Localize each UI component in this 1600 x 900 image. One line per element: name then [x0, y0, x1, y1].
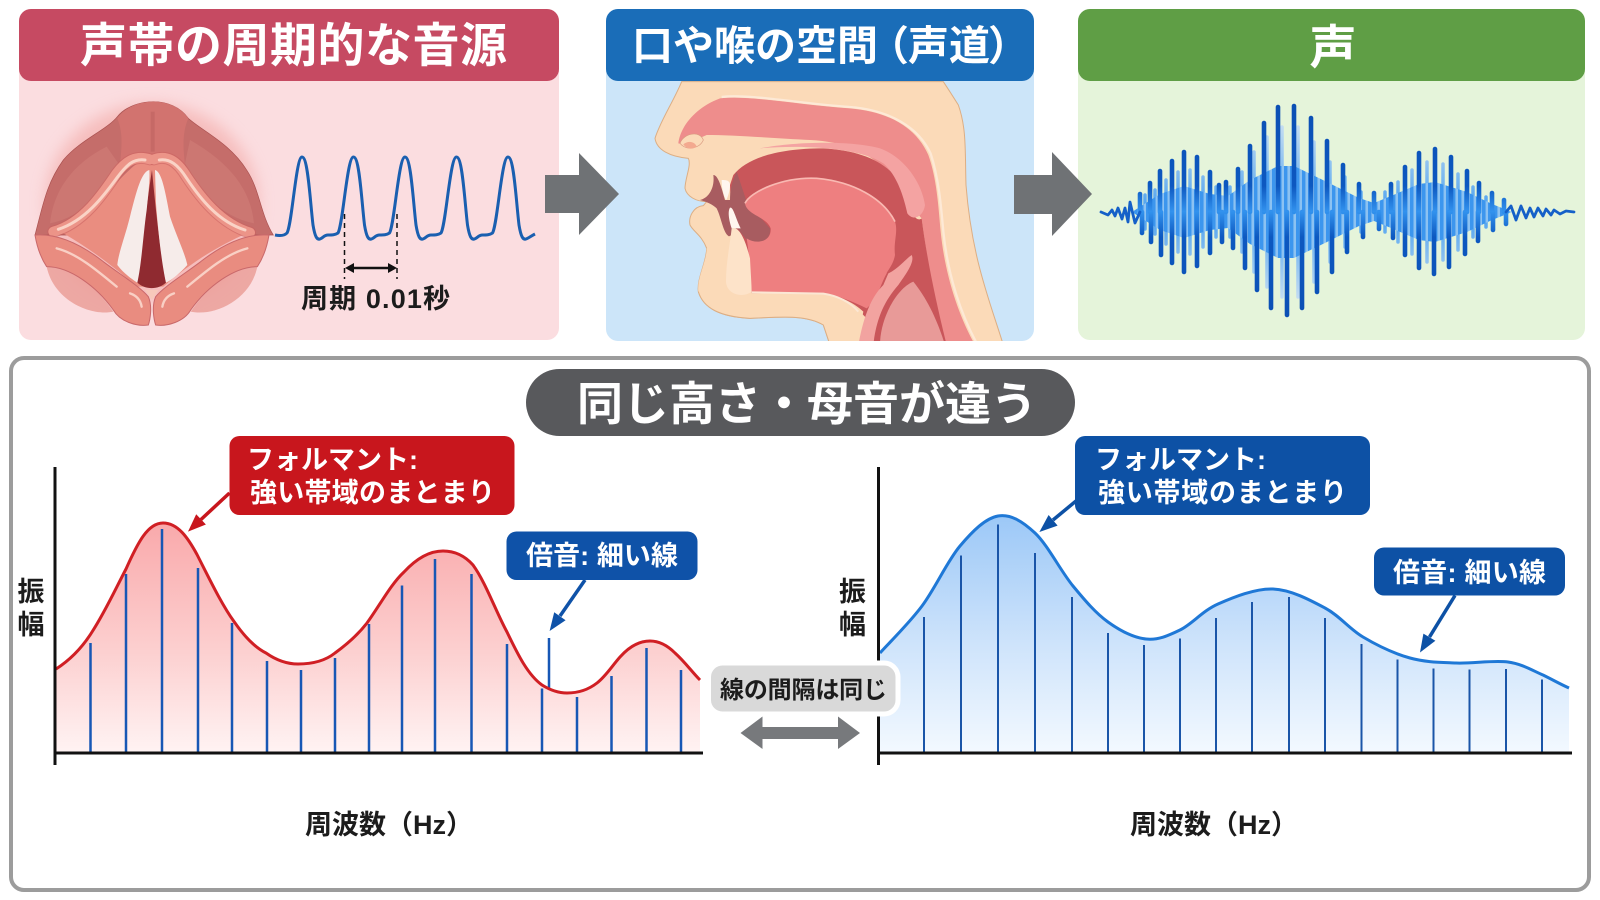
chart: periodic pulse wave [275, 157, 535, 239]
panel heading text: 口や喉の空間 [632, 23, 878, 69]
callout: formant blue: 強い帯域のまとまり [1098, 478, 1347, 508]
callout: formant blue: フォルマント: [1095, 445, 1266, 475]
chart: left vowel spectrum [18, 467, 703, 840]
axes [878, 467, 1572, 765]
harmonic lines [924, 524, 1542, 753]
label: same spacing pill [708, 663, 898, 714]
x axis label: 周波数（Hz） [1130, 810, 1298, 840]
callout: formant blue [1039, 436, 1370, 532]
heading pill: 同じ高さ・母音が違う [577, 378, 1037, 430]
callout: harmonics right: 倍音: 細い線 [1393, 558, 1546, 588]
chart: right vowel spectrum [839, 467, 1572, 840]
axes [55, 467, 703, 765]
illustration: vocal folds [35, 102, 273, 325]
y axis label: 振 [18, 577, 44, 607]
callout: formant red: 強い帯域のまとまり [250, 478, 495, 508]
y axis label: 振 [839, 577, 866, 607]
arrow: double-headed spacing arrow [740, 716, 860, 749]
panel heading bar [19, 9, 559, 81]
callout: harmonics left [506, 532, 698, 631]
panel: comparison frame [11, 358, 1589, 890]
label: same spacing pill: 線の間隔は同じ [720, 677, 887, 704]
x axis label: 周波数（Hz） [305, 810, 473, 840]
panel: voice [1078, 9, 1585, 340]
period label: 周期 0.01秒 [301, 284, 450, 314]
panel heading text: 声帯の周期的な音源 [80, 19, 507, 72]
envelope curve [56, 523, 700, 693]
panel heading text: 声 [1310, 21, 1356, 74]
panel body [1078, 9, 1585, 340]
envelope curve [880, 516, 1569, 688]
harmonic lines [90, 529, 681, 753]
callout: harmonics left: 倍音: 細い線 [526, 541, 678, 571]
callout: formant red: フォルマント: [247, 445, 418, 475]
callout: formant red [188, 436, 514, 532]
panel heading bar [606, 9, 1034, 81]
y axis label: 幅 [18, 610, 44, 640]
panel: vocal tract [606, 9, 1034, 345]
illustration: vocal tract cross-section [655, 82, 1003, 345]
heading pill [526, 369, 1075, 436]
spectrum envelope fill [880, 516, 1569, 753]
panel heading text: ） [988, 23, 1029, 69]
panel heading text: （ [868, 23, 909, 69]
arrow: source to vocal tract [545, 153, 619, 235]
panel: vocal fold source [19, 9, 559, 340]
callout: harmonics right [1374, 548, 1565, 652]
spectrum envelope fill [56, 523, 700, 753]
panel body [606, 9, 1034, 341]
panel heading text: 声道 [908, 23, 990, 69]
y axis label: 幅 [839, 610, 866, 640]
period dimension marker [344, 214, 397, 279]
chart: voice waveform [1101, 106, 1574, 315]
arrow: vocal tract to voice [1014, 152, 1092, 236]
panel body [19, 9, 559, 340]
panel heading bar [1078, 9, 1585, 81]
